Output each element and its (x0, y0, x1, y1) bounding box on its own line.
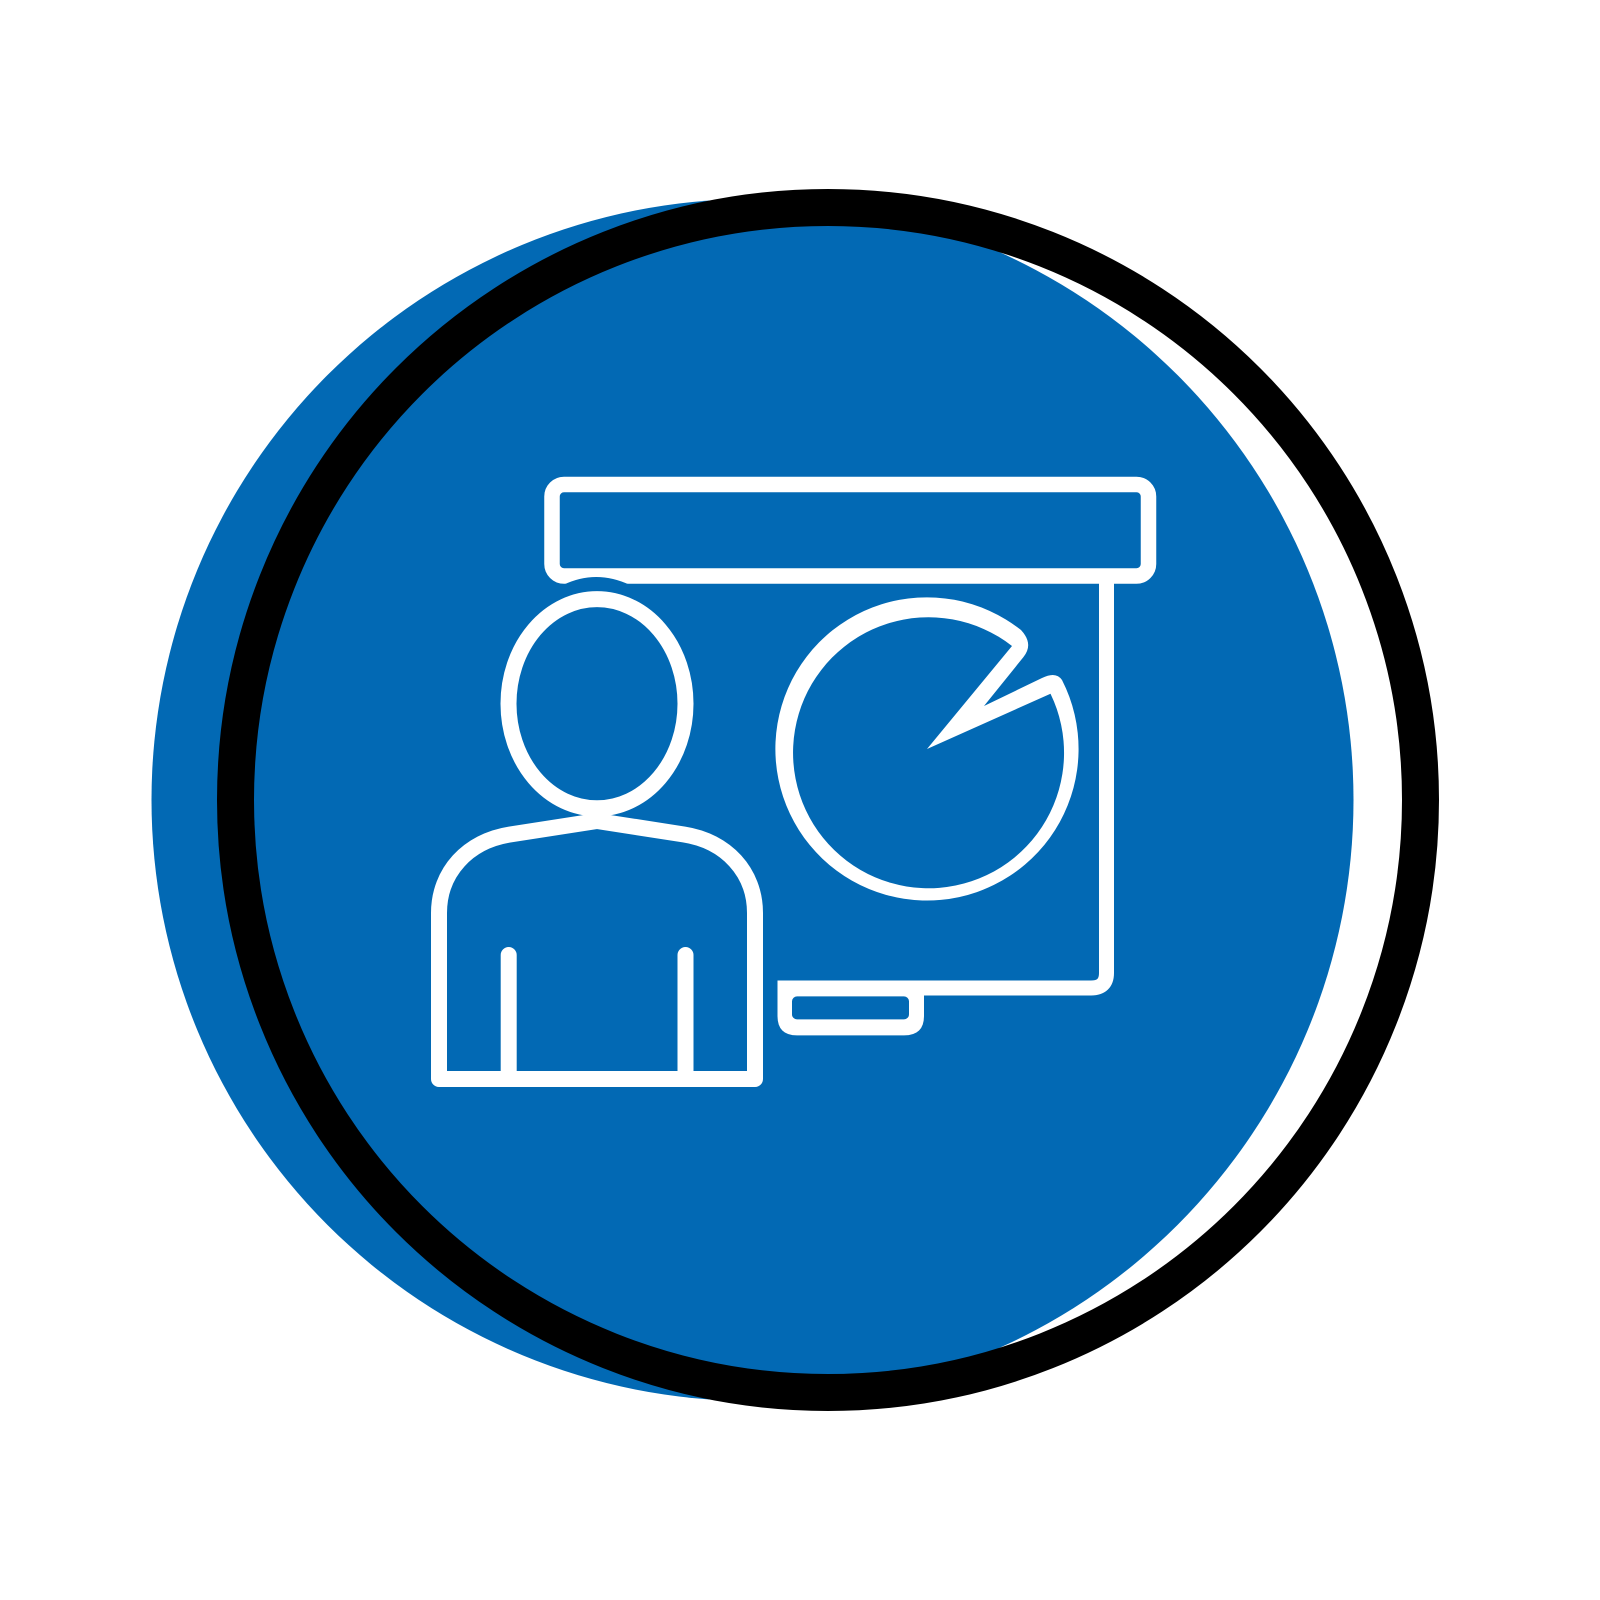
presenter figure (439, 599, 755, 1079)
pie interior (793, 617, 1064, 888)
head clearance notch (563, 577, 630, 585)
screen roller housing (552, 484, 1148, 576)
projection screen (552, 484, 1148, 1035)
icon: presenter and projection screen (439, 484, 1148, 1079)
pie outline (775, 597, 1079, 901)
handle interior (792, 996, 909, 1019)
screen pull handle (778, 980, 924, 1035)
icon: pie chart (775, 597, 1079, 901)
presenter head (508, 599, 686, 808)
black ring outline (236, 208, 1420, 1392)
screen edge and bottom rail (800, 580, 1106, 988)
handle frame (778, 980, 924, 1035)
blue offset disc (152, 199, 1354, 1401)
left arm line (501, 955, 517, 1079)
presenter torso (439, 821, 755, 1079)
right arm line (678, 955, 694, 1079)
